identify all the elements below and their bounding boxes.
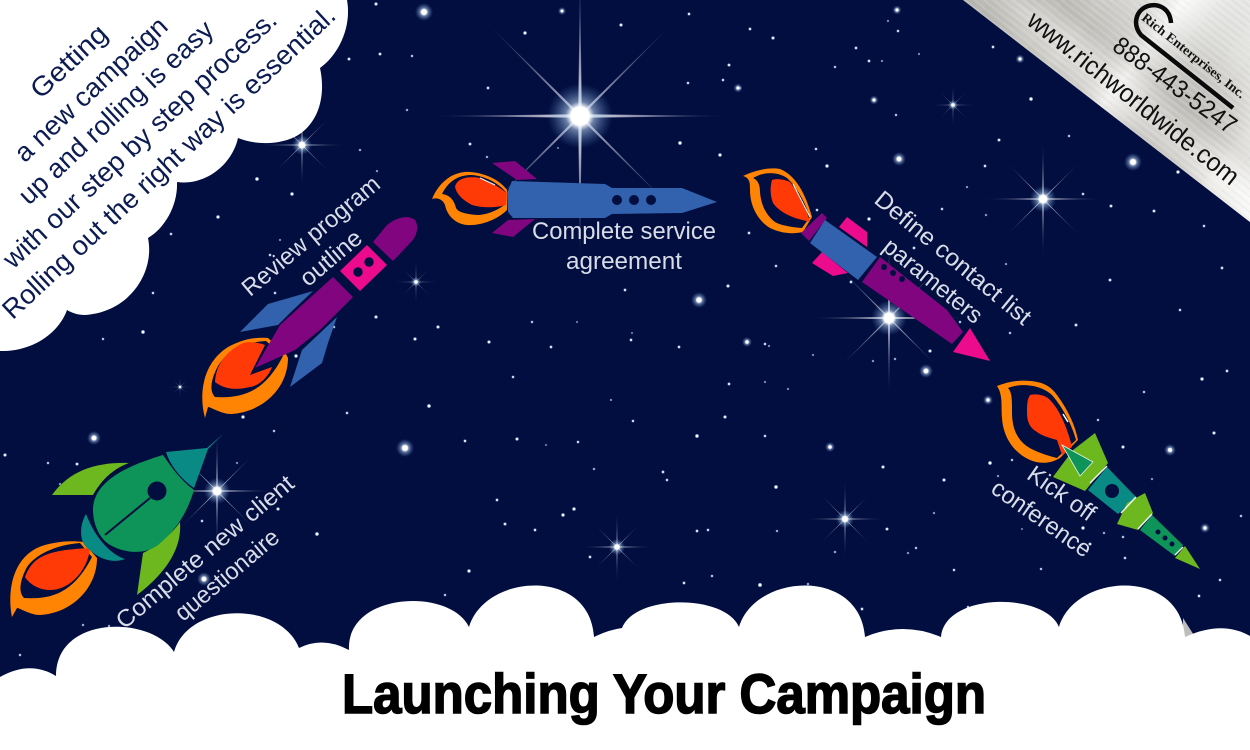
flame — [997, 381, 1078, 463]
intro text: with our step by step process. — [0, 5, 283, 275]
label — [532, 218, 716, 275]
intro text: Rolling out the right way is essential. — [0, 0, 341, 325]
flame — [10, 541, 97, 617]
rocket 2: purple — [202, 171, 417, 418]
intro text: a new campaign — [8, 11, 173, 168]
bright stars — [157, 0, 1103, 584]
label: conference — [986, 475, 1097, 563]
intro text: up and rolling is easy — [12, 14, 220, 210]
label: questionaire — [169, 524, 285, 627]
phone number: 888-443-5247 — [1107, 31, 1242, 140]
flame — [202, 338, 288, 418]
flame — [743, 168, 812, 233]
website: www.richworldwide.com — [1021, 4, 1246, 191]
rocket 4: purple and pink — [743, 168, 1037, 361]
panel: bottom clouds — [0, 585, 1250, 750]
label: parameters — [878, 233, 988, 329]
rocket 5: green stages — [986, 381, 1200, 569]
label: Review program — [237, 171, 386, 302]
logo: Rich Enterprises hook: Rich Enterprises, Inc. — [1139, 10, 1249, 101]
label: Complete service — [532, 218, 716, 245]
rocket 1: green — [10, 434, 300, 635]
label: agreement — [566, 248, 682, 275]
intro text: Getting — [24, 18, 113, 104]
label: Complete new client — [111, 470, 300, 635]
rocket 3: blue — [432, 161, 717, 275]
label: outline — [295, 224, 368, 292]
flame — [432, 172, 507, 225]
label: Define contact list — [869, 186, 1037, 331]
panel: intro cloud — [0, 0, 348, 351]
label: Kick off — [1022, 461, 1101, 527]
title: Launching Your Campaign — [342, 662, 986, 725]
panel: brushed metal contact banner — [963, 0, 1250, 222]
